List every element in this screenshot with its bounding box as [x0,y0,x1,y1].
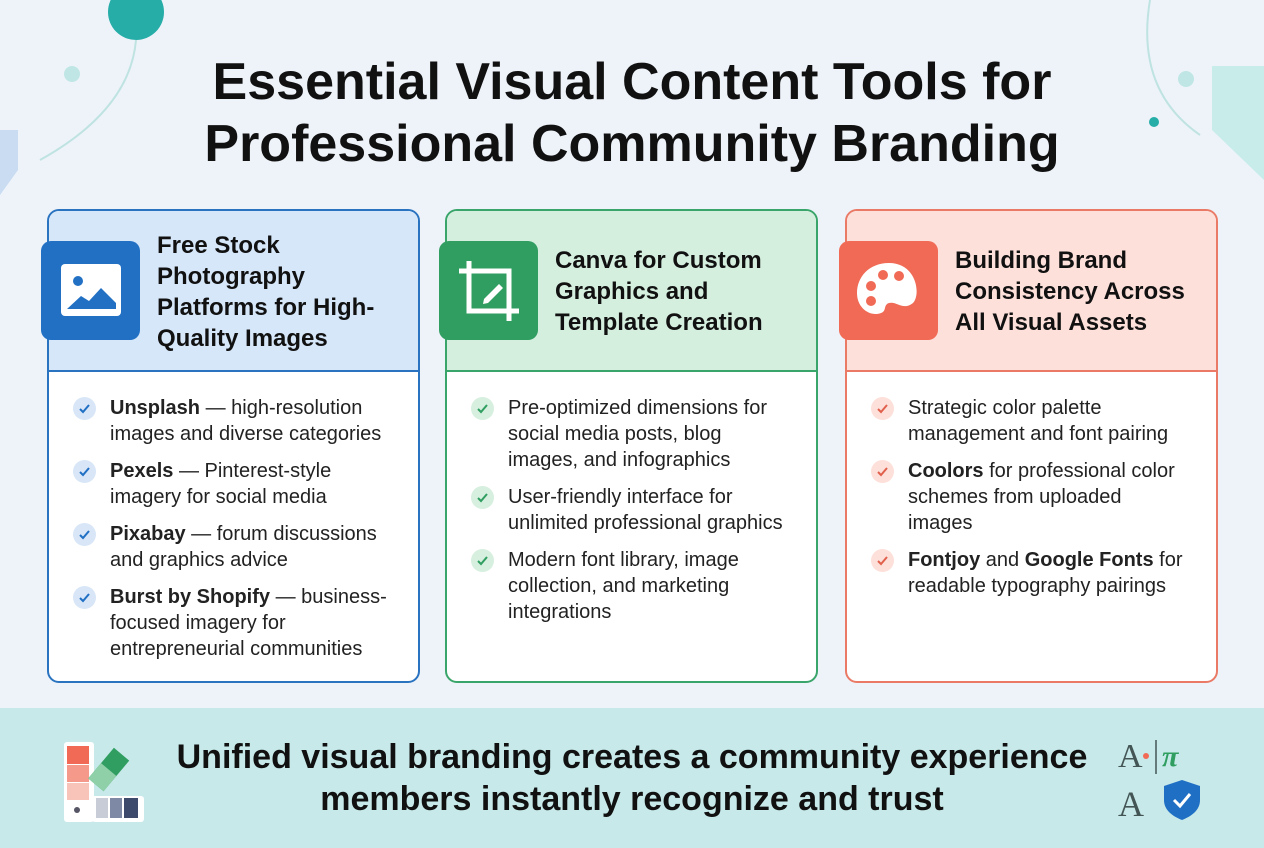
text: members instantly recognize and trust [320,780,944,818]
heading: Photography [157,263,305,290]
bottom band [0,708,1264,848]
icon: crop edit [439,241,538,340]
text [177,738,1087,818]
list: Modern font library, image collection, and marketing integrations [508,549,739,623]
icon: typography and shield: π [1162,740,1179,773]
decor: top-left circle and line [0,0,1264,195]
icon: typography and shield: A [1118,738,1143,775]
panel: brand consistency [845,209,1218,683]
title [204,53,1060,173]
heading [955,247,1185,336]
title: Professional Community Branding [204,115,1060,173]
heading [157,232,374,352]
heading: Platforms for High- [157,294,374,321]
panel: canva [445,209,818,683]
heading: Canva for Custom [555,247,762,274]
list: Pexels — Pinterest-style imagery for social media [110,460,331,508]
icon: typography and shield [1118,738,1200,824]
icon: palette [839,241,938,340]
heading [555,247,763,336]
list: Pre-optimized dimensions for social media posts, blog images, and infographics [508,397,767,471]
icon: typography and shield: A [1118,784,1144,824]
icon: image [41,241,140,340]
icon: swatches [64,742,144,822]
heading: Consistency Across [955,278,1185,305]
list: Burst by Shopify — business-focused imagery for entrepreneurial communities [110,586,387,660]
list [871,397,1182,597]
heading: Graphics and [555,278,708,305]
title: Essential Visual Content Tools for [213,53,1051,111]
list: Unsplash — high-resolution images and diverse categories [110,397,381,445]
list: Fontjoy and Google Fonts for readable typography pairings [908,549,1182,597]
heading: Quality Images [157,325,328,352]
text: Unified visual branding creates a community experience [177,738,1087,776]
list: Pixabay — forum discussions and graphics advice [110,523,377,571]
panel: free stock photography [47,209,420,683]
heading: Template Creation [555,309,763,336]
heading: Free Stock [157,232,280,259]
list [471,397,783,623]
list: Strategic color palette management and font pairing [908,397,1168,445]
heading: Building Brand [955,247,1127,274]
list: User-friendly interface for unlimited professional graphics [508,486,783,534]
list [73,397,387,660]
list: Coolors for professional color schemes from uploaded images [908,460,1175,534]
heading: All Visual Assets [955,309,1147,336]
